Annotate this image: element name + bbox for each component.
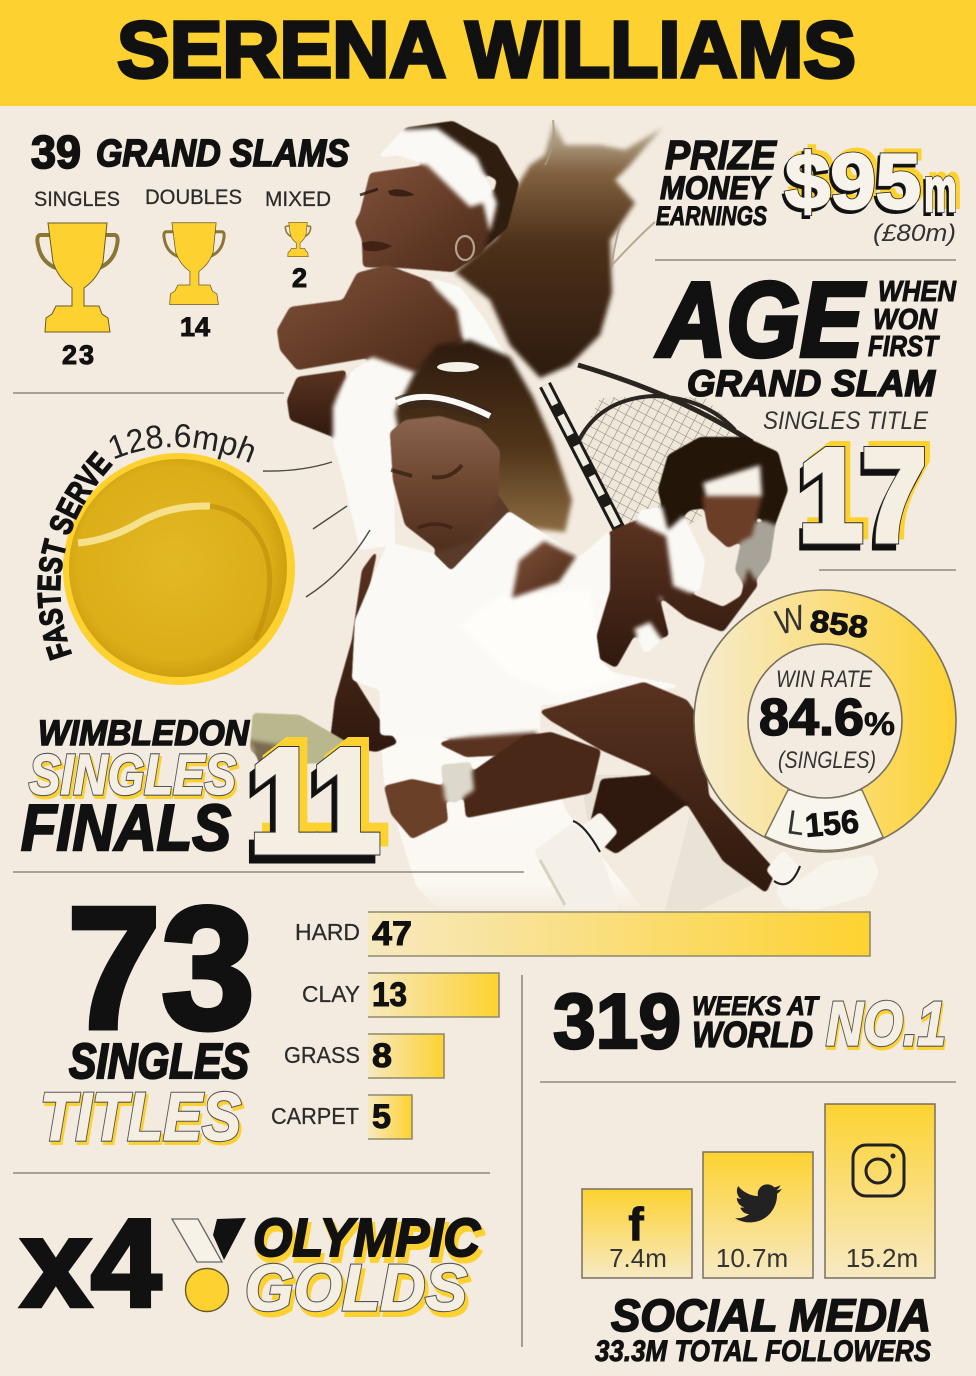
figure one: top and arms (277, 265, 505, 550)
label: wins 858: W (772, 598, 809, 643)
bar: instagram: 15.2m (846, 1243, 918, 1273)
value: $95m: $95 (785, 137, 921, 225)
label: fastest serve: FASTEST SERVE (37, 450, 114, 661)
label: wins 858 (772, 598, 870, 645)
value: 84.6 percent: 84.6 (759, 689, 864, 747)
heading: singles outlined: SINGLES (29, 743, 236, 807)
heading: singles outlined: SINGLES (31, 746, 238, 810)
inner circle (748, 644, 902, 798)
title banner (0, 0, 976, 106)
panel: olympic golds (21, 1195, 484, 1333)
heading: 39 grand slams: GRAND SLAMS (96, 133, 349, 175)
bar: carpet 5 (271, 1095, 412, 1139)
heading: golds outlined: GOLDS (245, 1251, 467, 1324)
bar: instagram (825, 1104, 935, 1278)
panel: fastest serve (37, 424, 370, 685)
value: $95m (783, 133, 961, 228)
value: 17: 17 (796, 428, 923, 574)
heading: titles outlined: TITLES (42, 1082, 243, 1158)
chart: titles by surface (271, 912, 870, 1139)
label: win rate: WIN RATE (776, 666, 873, 693)
icon: mixed trophy (285, 222, 311, 257)
bar: carpet 5: 5 (372, 1098, 391, 1136)
heading: no.1 outlined: NO.1 (827, 993, 947, 1062)
photo montage of Serena Williams (250, 120, 879, 910)
bar: facebook (582, 1189, 692, 1278)
value: $95m: $95 (783, 140, 919, 228)
chart: win rate donut (694, 590, 956, 852)
panel: social media (582, 1104, 935, 1368)
value: 319: 319 (553, 977, 681, 1065)
value: 11: 11 (250, 719, 380, 882)
heading: golds outlined: GOLDS (248, 1256, 470, 1329)
bar: clay 13: 13 (372, 976, 407, 1014)
value: 17: 17 (804, 417, 931, 563)
label: prize money earnings (656, 132, 778, 231)
ring: losses segment (765, 790, 883, 850)
panel: age at first grand slam (655, 261, 957, 574)
bar: facebook: 7.4m (609, 1243, 667, 1273)
label: weeks at world: WORLD (692, 1014, 813, 1055)
label: when won first: WHEN (878, 276, 957, 308)
value: singles 23: 23 (62, 340, 94, 370)
panel: wimbledon singles finals (21, 710, 388, 890)
figure three: legs (539, 682, 776, 893)
label: losses 156: L (785, 803, 807, 843)
figure one: face details (360, 189, 474, 260)
panel: prize money (656, 132, 961, 247)
bar: grass 8 (284, 1034, 444, 1078)
bar: grass 8: GRASS (284, 1042, 360, 1068)
value: 84.6 percent: % (864, 706, 895, 742)
bar: clay 13 (302, 973, 499, 1017)
icon: doubles trophy (164, 223, 224, 304)
figure one: head and headband (355, 121, 519, 272)
heading: olympic: OLYMPIC (255, 1213, 484, 1273)
value: 11: 11 (250, 719, 380, 882)
label: weeks at world (692, 991, 820, 1055)
label: prize money earnings: PRIZE (665, 132, 778, 178)
heading: 39 grand slams (31, 126, 349, 178)
bar: hard 47 (295, 912, 870, 956)
racket (545, 365, 752, 550)
value: $95m: m (922, 159, 955, 228)
label: wins 858: 858 (808, 603, 870, 645)
value: 11: 11 (245, 727, 375, 890)
heading: singles: SINGLES (69, 1035, 249, 1089)
trophy held in hand (250, 713, 352, 770)
label: singles title: SINGLES TITLE (763, 407, 928, 435)
label: when won first (868, 276, 957, 363)
title banner: SERENA WILLIAMS (117, 5, 856, 94)
value: mixed 2: 2 (292, 263, 307, 293)
panel: weeks at world number one (553, 977, 947, 1065)
heading: social media: SOCIAL MEDIA (611, 1290, 931, 1341)
value: 17: 17 (799, 422, 926, 568)
bar: facebook: f (628, 1198, 644, 1250)
label: total followers: 33.3M TOTAL FOLLOWERS (595, 1335, 931, 1368)
value: 73: 73 (67, 870, 255, 1065)
bar: hard 47: 47 (372, 915, 412, 953)
label: doubles: DOUBLES (145, 186, 242, 209)
figure three: running player upper body (591, 437, 788, 668)
value: x4: x4 (21, 1195, 161, 1333)
label: when won first: FIRST (868, 331, 940, 363)
heading: singles outlined: SINGLES (29, 743, 236, 807)
heading: titles outlined: TITLES (40, 1079, 241, 1155)
heading: 39 grand slams: 39 (31, 126, 81, 178)
speed lines (263, 462, 370, 597)
figure two: forearm, hand and watch (384, 732, 601, 839)
label: weeks at world: WEEKS AT (692, 991, 820, 1021)
bar: clay 13: CLAY (302, 981, 360, 1007)
heading: olympic: OLYMPIC (253, 1208, 481, 1268)
label: singles: SINGLES (34, 188, 120, 211)
bar: twitter (703, 1152, 813, 1278)
icon: singles trophy (37, 223, 118, 332)
label: prize money earnings: MONEY (660, 170, 771, 206)
figure two: face, neck and headband (390, 416, 510, 572)
figure two: lower skirt fading out (380, 729, 762, 910)
label: when won first: WON (873, 304, 938, 336)
heading: no.1 outlined: NO.1 (826, 990, 946, 1059)
bar: carpet 5: CARPET (271, 1103, 359, 1129)
heading: no.1 outlined: NO.1 (826, 990, 946, 1059)
figure two: dress (352, 511, 684, 757)
icon: tennis ball (63, 453, 295, 685)
heading: golds outlined: GOLDS (245, 1251, 467, 1324)
ring: wins segment (694, 590, 956, 852)
heading: grand slam: GRAND SLAM (687, 363, 936, 404)
heading: age: AGE (655, 261, 866, 379)
panel: singles titles (40, 870, 255, 1158)
icon: gold medal (172, 1218, 246, 1312)
label: prize money earnings: EARNINGS (656, 201, 767, 231)
bar: hard 47: HARD (295, 919, 360, 945)
heading: titles outlined: TITLES (40, 1079, 241, 1155)
label: losses 156: 156 (803, 802, 860, 844)
heading: wimbledon: WIMBLEDON (38, 714, 250, 753)
flying ponytail (455, 120, 662, 378)
bar: grass 8: 8 (372, 1037, 392, 1075)
value: doubles 14: 14 (180, 312, 210, 342)
value: $95m: $95 (789, 133, 925, 221)
value: 17: 17 (799, 422, 926, 568)
value: pounds 80m: (£80m) (873, 220, 956, 247)
panel: grand slams (31, 126, 349, 370)
value: 11: 11 (258, 710, 388, 873)
value: 128.6mph: 128.6mph (110, 424, 254, 463)
figure two: left arm (330, 548, 398, 752)
bar: twitter: 10.7m (716, 1243, 788, 1273)
label: singles: (SINGLES) (778, 747, 876, 774)
value: $95m: $95 (785, 137, 921, 225)
label: mixed: MIXED (265, 188, 331, 211)
heading: finals: FINALS (21, 791, 231, 864)
figure two: face details (391, 362, 490, 528)
figure three: socks and shoes (534, 812, 879, 910)
figure two: hair (395, 340, 572, 532)
